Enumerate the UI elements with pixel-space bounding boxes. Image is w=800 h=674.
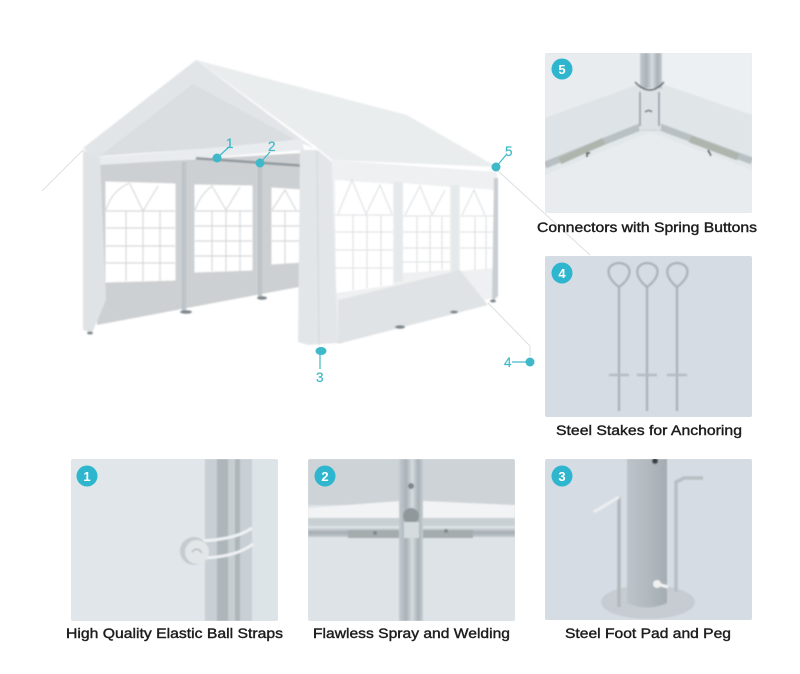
marker 2: 2 (268, 139, 276, 154)
stakes (608, 263, 688, 411)
side feet (87, 300, 496, 334)
tent back wall (97, 153, 302, 325)
badge 4 (552, 262, 572, 284)
badge 1 (76, 466, 98, 486)
marker 5: 5 (505, 144, 513, 159)
marker 1 (212, 136, 234, 162)
side window lattice (335, 180, 495, 290)
gable inner panel (100, 84, 300, 156)
panel 3: foot pad (545, 458, 752, 620)
panel 2: welding (308, 459, 515, 621)
marker 2 (256, 139, 276, 168)
lower skirt (338, 270, 488, 344)
front right corner column (298, 150, 338, 345)
tent roof (196, 60, 497, 167)
connector photo (545, 53, 752, 168)
marker 3 (316, 347, 326, 385)
badge 2 (314, 466, 336, 486)
marker 4 (504, 355, 534, 370)
side wall seams (394, 182, 459, 282)
caption 1: High Quality Elastic Ball Straps (66, 625, 283, 641)
tent illustration (83, 60, 498, 345)
leader lines (42, 150, 590, 356)
right corner leg (492, 178, 498, 302)
caption 3: Steel Foot Pad and Peg (565, 625, 731, 641)
badge 2: 2 (321, 469, 329, 484)
foot pad and pegs (594, 458, 703, 619)
marker 5 (492, 144, 513, 172)
back windows (106, 182, 301, 282)
marker 3: 3 (316, 370, 324, 385)
front poles (180, 157, 302, 314)
panel 4: stakes (545, 256, 752, 417)
marker 1: 1 (226, 136, 234, 151)
panel 5: connectors (545, 53, 752, 213)
badge 3 (552, 466, 572, 486)
welded joint photo (308, 459, 515, 621)
badge 5: 5 (558, 62, 566, 77)
caption 2: Flawless Spray and Welding (313, 625, 510, 641)
caption 4: Steel Stakes for Anchoring (556, 422, 742, 438)
callout markers on tent (212, 136, 534, 385)
back window lattice (106, 183, 301, 281)
marker 4: 4 (504, 355, 512, 370)
caption 5: Connectors with Spring Buttons (537, 219, 757, 235)
left corner column (83, 150, 106, 333)
panel 1: elastic ball strap (71, 459, 278, 621)
strap photo (180, 459, 253, 621)
side wall (332, 160, 498, 344)
side windows (335, 180, 495, 293)
badge 4: 4 (558, 266, 566, 281)
badge 3: 3 (558, 469, 566, 484)
badge 1: 1 (83, 469, 91, 484)
badge 5 (552, 58, 572, 80)
tent gable frame (83, 60, 332, 162)
